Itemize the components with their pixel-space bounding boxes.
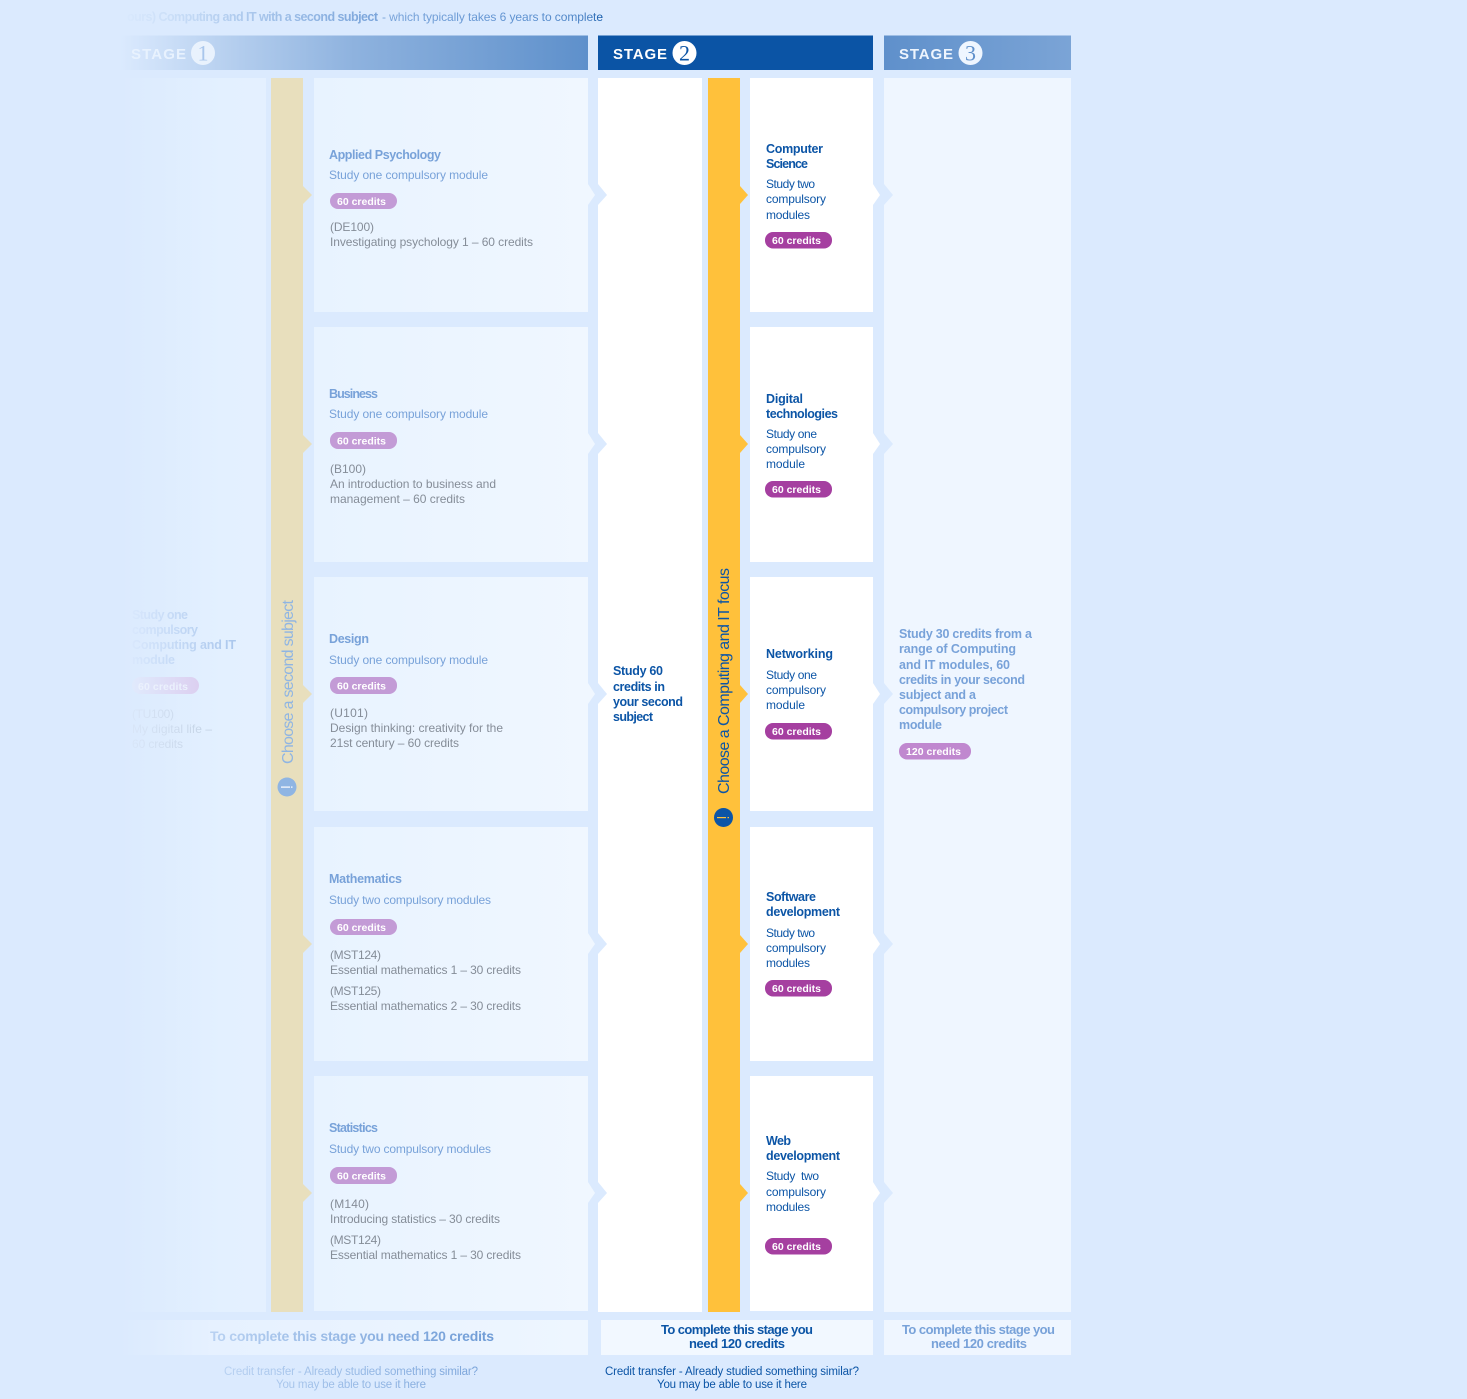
panel: Mathematics: Essential mathematics 1 – 30 credits xyxy=(330,963,521,977)
panel: Design: Design thinking: creativity for the xyxy=(330,721,503,735)
credit transfer: stage 2: You may be able to use it here xyxy=(657,1379,807,1391)
footer: stage 1 credits xyxy=(120,1320,588,1355)
panel: Web development: 60 credits xyxy=(772,1241,821,1253)
stage 3 header xyxy=(884,36,1071,70)
panel: stage 1 compulsory module: Computing and IT xyxy=(132,638,236,652)
panel: Applied Psychology: (DE100) xyxy=(330,220,374,234)
panel: Business: Business xyxy=(329,387,378,401)
panel: Computer Science: modules xyxy=(766,208,810,222)
footer: stage 2 credits: To complete this stage you xyxy=(661,1322,813,1337)
panel: Applied Psychology: Investigating psychology 1 – 60 credits xyxy=(330,235,533,249)
panel: Applied Psychology: Study one compulsory module xyxy=(329,168,488,182)
panel: Computer Science: Science xyxy=(766,157,808,171)
panel: Mathematics: (MST125) xyxy=(330,984,381,998)
panel: Applied Psychology: 60 credits xyxy=(337,196,386,208)
panel: Networking: compulsory xyxy=(766,683,826,697)
title: - which typically takes 6 years to complete xyxy=(382,10,603,24)
panel: stage 2 second subject: credits in xyxy=(613,680,665,694)
panel: Design: Study one compulsory module xyxy=(329,653,488,667)
panel: Web development: development xyxy=(766,1149,841,1163)
connector arrows: stage 1 to stage 2 xyxy=(588,184,607,1203)
panel: Web development: Web xyxy=(766,1134,791,1148)
panel: stage 3: compulsory project xyxy=(899,703,1009,717)
panel: Computer Science: Computer xyxy=(766,142,823,156)
panel: Statistics: Introducing statistics – 30 credits xyxy=(330,1212,500,1226)
panel: Web development xyxy=(750,1076,873,1311)
panel: stage 1 compulsory module: 60 credits xyxy=(132,737,183,751)
panel: stage 1 compulsory module: module xyxy=(132,653,175,667)
panel: Applied Psychology: Applied Psychology xyxy=(329,148,441,162)
panel: Digital technologies: compulsory xyxy=(766,442,826,456)
stage 3 header: 3 xyxy=(965,40,976,66)
panel: Business: Study one compulsory module xyxy=(329,407,488,421)
footer: stage 1 credits: To complete this stage you need 120 credits xyxy=(210,1328,494,1344)
panel: stage 3: subject and a xyxy=(899,688,977,702)
bar: choose a Computing and IT focus xyxy=(708,78,748,1312)
panel: Networking: Study one xyxy=(766,668,817,682)
panel: Design: Design xyxy=(329,632,369,646)
panel: Mathematics: Essential mathematics 2 – 30 credits xyxy=(330,999,521,1013)
panel: Software development: Software xyxy=(766,890,816,904)
panel: Business: 60 credits xyxy=(337,436,386,448)
panel: Statistics: (M140) xyxy=(330,1197,369,1211)
stage 2 header: 2 xyxy=(679,40,690,66)
panel: stage 2 second subject xyxy=(598,78,702,1312)
footer: stage 3 credits xyxy=(884,1320,1071,1355)
panel: stage 3: range of Computing xyxy=(899,642,1016,656)
panel: stage 3 xyxy=(884,78,1071,1312)
credit transfer: stage 1: You may be able to use it here xyxy=(276,1379,426,1391)
panel: Applied Psychology xyxy=(314,78,588,312)
stage 2 header xyxy=(598,36,873,70)
panel: Statistics: (MST124) xyxy=(330,1233,381,1247)
footer: stage 2 credits: need 120 credits xyxy=(689,1336,785,1351)
panel: stage 3: module xyxy=(899,718,942,732)
panel: Computer Science: compulsory xyxy=(766,192,826,206)
panel: stage 3: Study 30 credits from a xyxy=(899,627,1033,641)
footer: stage 3 credits: need 120 credits xyxy=(931,1336,1027,1351)
panel: Digital technologies xyxy=(750,327,873,562)
bar: choose a Computing and IT focus: Choose a Computing and IT focus xyxy=(716,568,733,794)
panel: Mathematics: Mathematics xyxy=(329,872,402,886)
panel: Computer Science xyxy=(750,78,873,312)
panel: Design: 60 credits xyxy=(337,680,386,692)
panel: Statistics: Statistics xyxy=(329,1121,378,1135)
footer: stage 3 credits: To complete this stage you xyxy=(902,1322,1055,1337)
panel: Digital technologies: Digital xyxy=(766,392,803,406)
panel: Software development: 60 credits xyxy=(772,983,821,995)
panel: Software development: compulsory xyxy=(766,941,826,955)
panel: stage 1 compulsory module: compulsory xyxy=(132,623,198,637)
panel: stage 3: and IT modules, 60 xyxy=(899,658,1010,672)
panel: Digital technologies: Study one xyxy=(766,427,817,441)
panel: Web development: compulsory xyxy=(766,1185,826,1199)
panel: Digital technologies: technologies xyxy=(766,407,838,421)
panel: stage 1 compulsory module: 60 credits xyxy=(138,681,188,693)
stage 1 header: STAGE xyxy=(131,46,186,63)
panel: Digital technologies: module xyxy=(766,457,805,471)
panel: Design: (U101) xyxy=(330,706,368,720)
panel: Statistics xyxy=(314,1076,588,1311)
panel: Software development xyxy=(750,827,873,1061)
panel: Software development: development xyxy=(766,905,841,919)
panel: Networking xyxy=(750,577,873,811)
panel: Networking: 60 credits xyxy=(772,726,821,738)
panel: stage 3: 120 credits xyxy=(906,746,961,758)
panel: Business xyxy=(314,327,588,562)
panel: stage 1 compulsory module: Study one xyxy=(132,608,188,622)
panel: Networking: module xyxy=(766,698,805,712)
panel: Statistics: Study two compulsory modules xyxy=(329,1142,491,1156)
panel: Web development: modules xyxy=(766,1200,810,1214)
bar: choose a second subject xyxy=(271,78,312,1312)
stage 3 header: STAGE xyxy=(899,46,953,63)
panel: Design xyxy=(314,577,588,811)
panel: Software development: modules xyxy=(766,956,810,970)
panel: Digital technologies: 60 credits xyxy=(772,484,821,496)
panel: Statistics: 60 credits xyxy=(337,1170,386,1182)
stage 1 header: 1 xyxy=(198,40,208,66)
title xyxy=(127,10,603,24)
credit transfer: stage 2: Credit transfer - Already studied something similar? xyxy=(605,1366,859,1378)
panel: Business: An introduction to business and xyxy=(330,477,496,491)
panel: Web development: Study two xyxy=(766,1169,819,1183)
panel: Computer Science: 60 credits xyxy=(772,235,821,247)
panel: Mathematics: 60 credits xyxy=(337,922,386,934)
footer: stage 2 credits xyxy=(601,1320,873,1355)
panel: Computer Science: Study two xyxy=(766,177,815,191)
panel: Business: management – 60 credits xyxy=(330,492,465,506)
bar: choose a second subject: Choose a second subject xyxy=(280,599,297,764)
panel: Mathematics xyxy=(314,827,588,1061)
panel: stage 2 second subject: Study 60 xyxy=(613,664,663,678)
panel: Business: (B100) xyxy=(330,462,366,476)
panel: stage 2 second subject: subject xyxy=(613,710,654,724)
panel: Mathematics: (MST124) xyxy=(330,948,381,962)
credit transfer: stage 2 xyxy=(605,1366,859,1391)
stage 2 header: STAGE xyxy=(613,46,667,63)
connector arrows: stage 2 to stage 3 xyxy=(873,184,893,1203)
panel: Software development: Study two xyxy=(766,926,815,940)
panel: Networking: Networking xyxy=(766,647,833,661)
credit transfer: stage 1: Credit transfer - Already studied something similar? xyxy=(224,1366,478,1378)
panel: stage 1 compulsory module xyxy=(120,78,266,1312)
panel: stage 1 compulsory module: (TU100) xyxy=(132,707,174,721)
credit transfer: stage 1 xyxy=(224,1366,478,1391)
panel: Mathematics: Study two compulsory modules xyxy=(329,893,491,907)
stage 1 header xyxy=(120,36,588,70)
title: ours) Computing and IT with a second subject xyxy=(127,10,379,24)
panel: Design: 21st century – 60 credits xyxy=(330,736,459,750)
panel: stage 2 second subject: your second xyxy=(613,695,683,709)
panel: Statistics: Essential mathematics 1 – 30 credits xyxy=(330,1248,521,1262)
panel: stage 1 compulsory module: My digital life – xyxy=(132,722,212,736)
panel: stage 3: credits in your second xyxy=(899,673,1025,687)
